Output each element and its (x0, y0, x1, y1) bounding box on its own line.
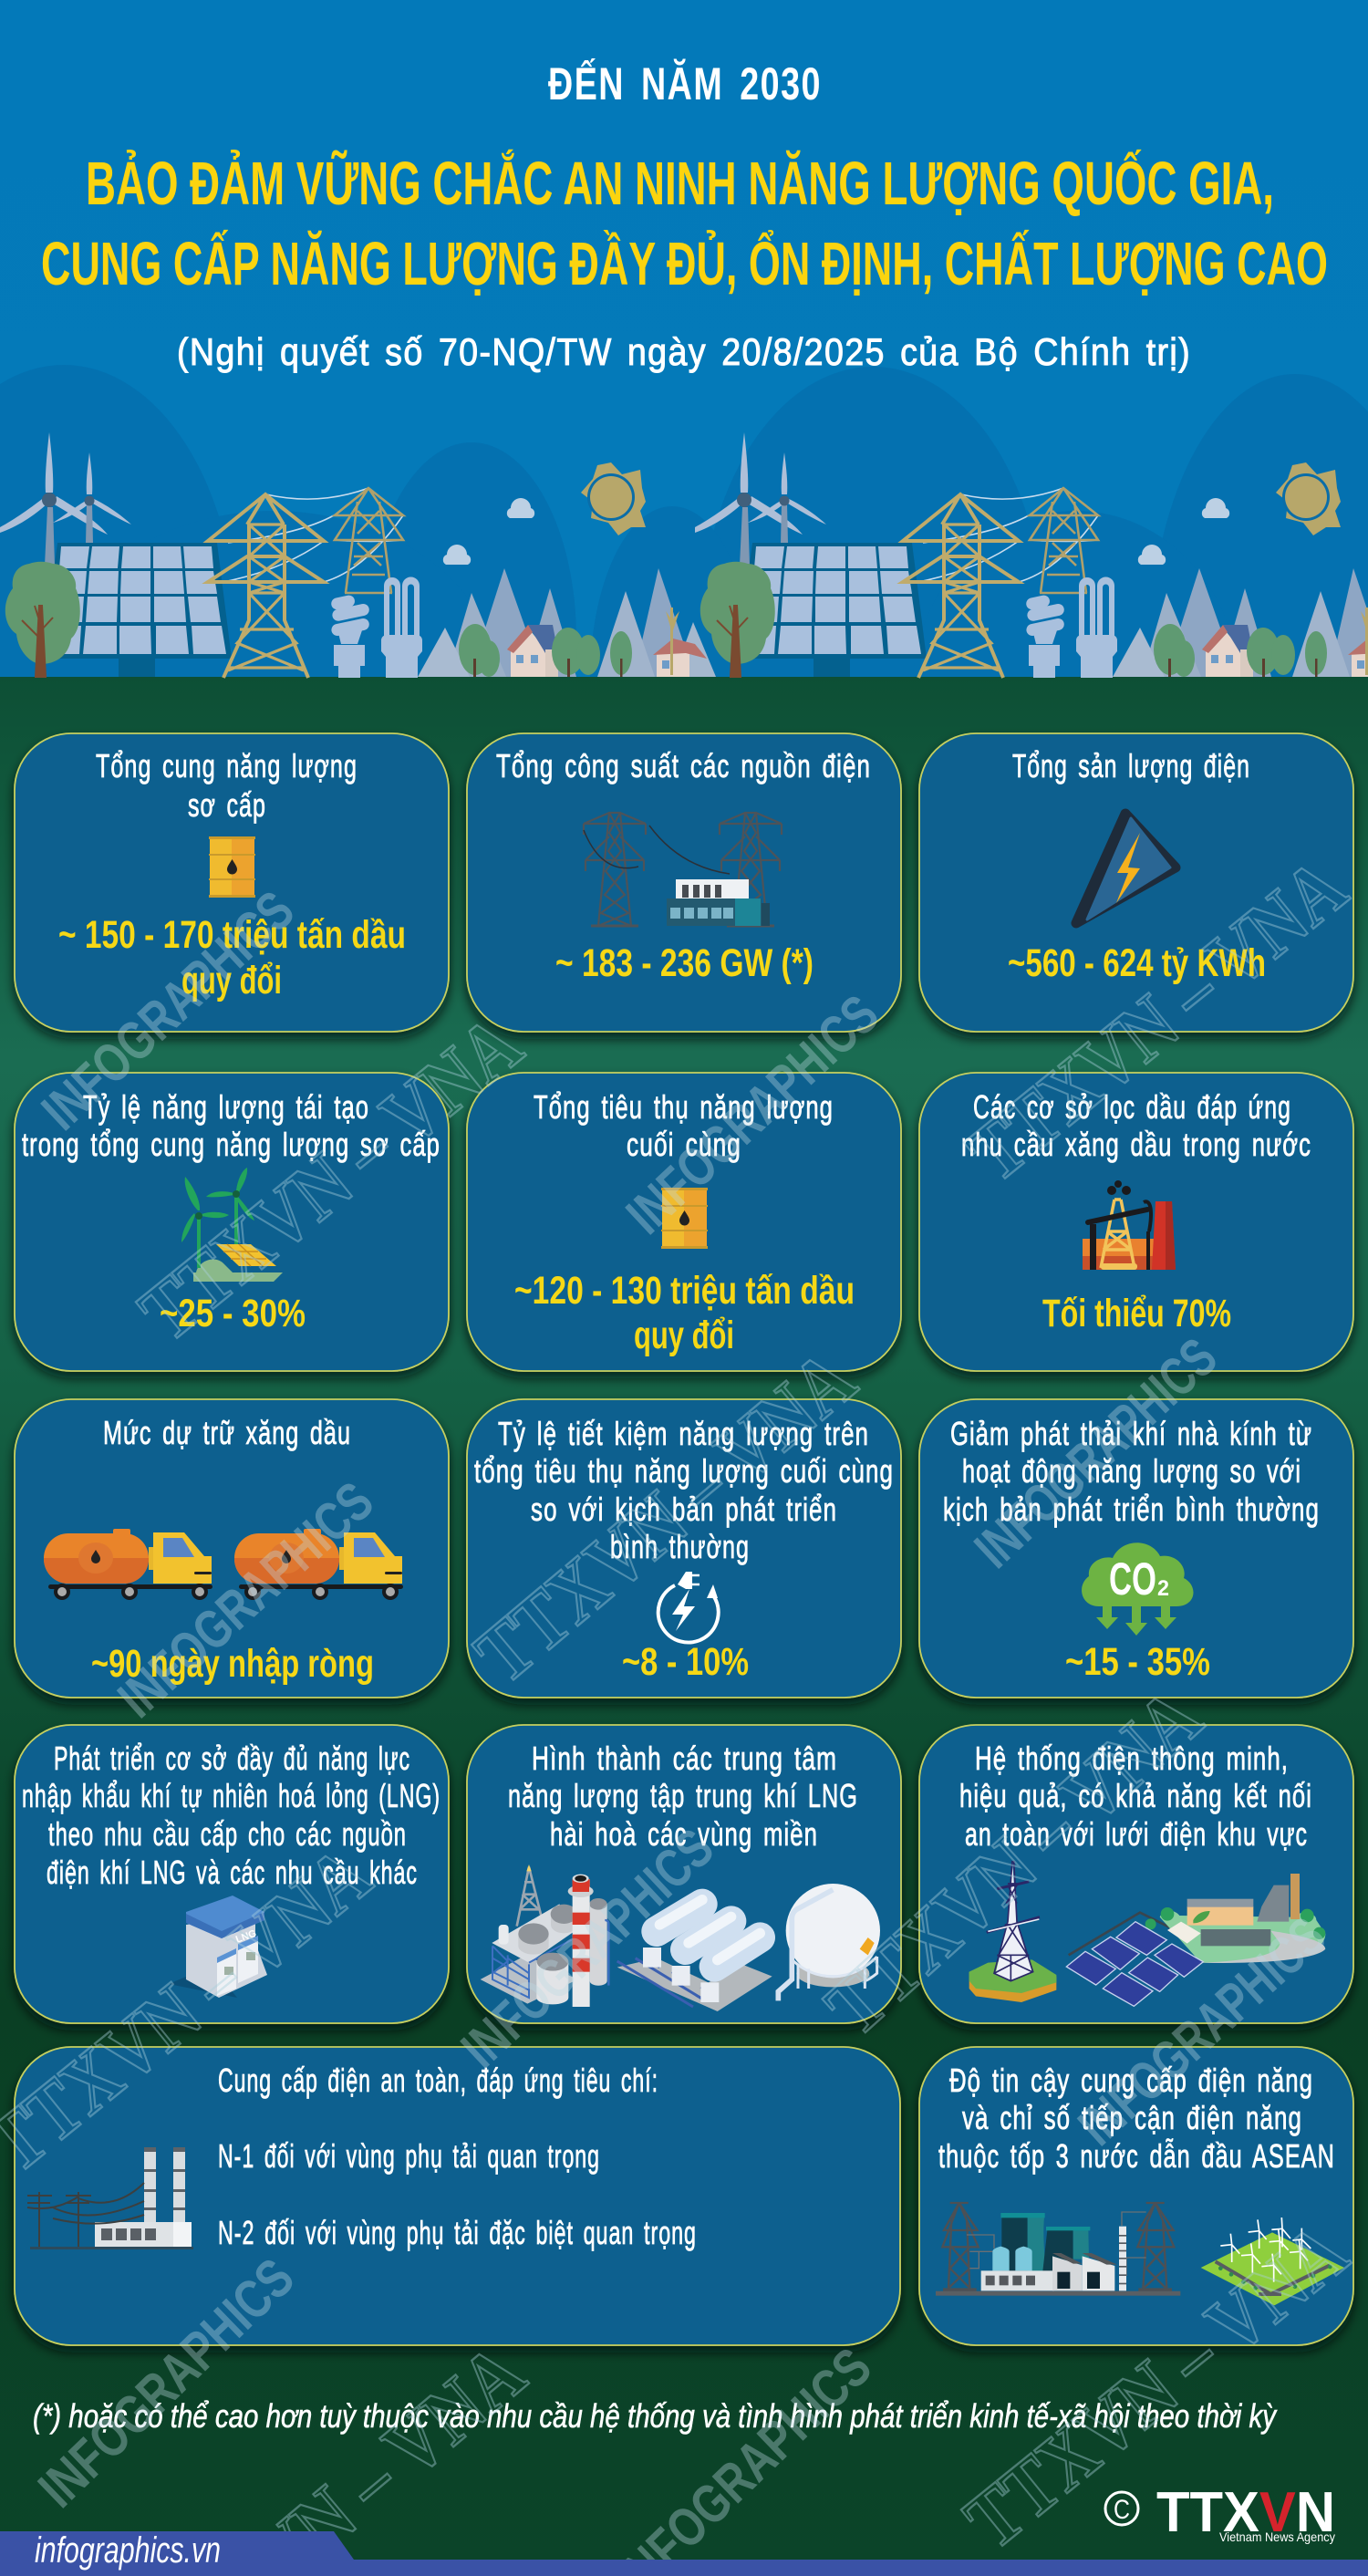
panel: final energy consumption: cuối cùng (627, 1126, 741, 1163)
panel: LNG energy hubs: Hình thành các trung tâm (532, 1740, 837, 1777)
panel: energy savings: ~8 - 10% (622, 1640, 749, 1684)
icon: tanker truck (44, 1529, 212, 1600)
watermarks: TTXVN – VNA (459, 1334, 872, 1700)
panel: total primary energy supply: quy đổi (181, 959, 282, 1002)
panel: energy savings: so với kịch bản phát triển (531, 1491, 837, 1528)
watermarks: INFOGRAPHICS (26, 2247, 306, 2519)
panel: safe power supply criteria: N-2 đối với vùng phụ tải đặc biệt quan trọng (218, 2214, 697, 2251)
logo: TTXVN: C (1114, 2495, 1130, 2525)
icon: tanker truck (234, 1529, 403, 1600)
icon: wind turbines and solar panel (181, 1168, 283, 1282)
icon: CO2 cloud: 2 (1157, 1576, 1169, 1601)
heading: main title (41, 149, 1328, 298)
background: green area (0, 677, 1368, 2576)
panel: greenhouse gas reduction: ~15 - 35% (1065, 1640, 1210, 1684)
panel: renewable share: Tỷ lệ năng lượng tái tạo (83, 1088, 369, 1126)
illustration: energy landscape banner (0, 432, 1368, 678)
watermarks: TTXVN – VNA (123, 999, 538, 1359)
icon: LNG station (169, 1896, 267, 1998)
panel: safe power supply criteria (15, 2047, 900, 2345)
panel: final energy consumption: Tổng tiêu thụ năng lượng (534, 1088, 834, 1126)
icon: warning triangle with lightning bolt (1076, 814, 1176, 923)
panel: energy savings: tổng tiêu thụ năng lượng cuối cùng (474, 1452, 894, 1490)
panel: refineries: Tối thiểu 70% (1042, 1292, 1231, 1335)
footer: site name: infographics.vn (35, 2530, 221, 2571)
panel: LNG import infrastructure: điện khí LNG và các nhu cầu khác (47, 1854, 418, 1891)
icon: plug and lightning (658, 1572, 719, 1643)
watermarks: INFOGRAPHICS (450, 1817, 725, 2080)
watermarks: INFOGRAPHICS (30, 879, 306, 1142)
background: hills (0, 365, 1368, 940)
panel: total primary energy supply: Tổng cung năng lượng (96, 747, 358, 784)
watermarks: INFOGRAPHICS (615, 983, 890, 1246)
footer: blue band and tab (0, 2531, 1368, 2576)
panel: petroleum reserves: Mức dự trữ xăng dầu (103, 1414, 351, 1451)
panel: ASEAN reliability ranking (919, 2047, 1353, 2345)
watermarks: INFOGRAPHICS (963, 1326, 1228, 1580)
panel: renewable share (15, 1073, 449, 1371)
panel: refineries (919, 1073, 1353, 1371)
panel: renewable share: ~25 - 30% (160, 1292, 306, 1335)
panel: total primary energy supply: ~ 150 - 170 triệu tấn dầu (58, 913, 406, 957)
panel: greenhouse gas reduction (919, 1399, 1353, 1698)
panel: LNG energy hubs: hài hoà các vùng miền (550, 1815, 818, 1853)
panel: LNG import infrastructure: theo nhu cầu cấp cho các nguồn (48, 1815, 407, 1853)
panel: total power source capacity: Tổng công suất các nguồn điện (496, 747, 871, 784)
panel: energy savings (467, 1399, 901, 1698)
heading: resolution reference: (Nghị quyết số 70-NQ/TW ngày 20/8/2025 của Bộ Chính trị) (177, 330, 1191, 373)
panel: final energy consumption: quy đổi (634, 1314, 734, 1357)
panel: LNG energy hubs: năng lượng tập trung khí LNG (508, 1777, 858, 1814)
panel: energy savings: Tỷ lệ tiết kiệm năng lượng trên (498, 1415, 869, 1452)
icon: CO2 cloud: CO (1109, 1553, 1156, 1605)
panel: petroleum reserves (15, 1399, 449, 1698)
logo: TTXVN: TTXVN (1156, 2481, 1335, 2544)
panel: total primary energy supply: sơ cấp (188, 786, 266, 824)
icon: oil derrick and refinery (1083, 1180, 1176, 1270)
panel: safe power supply criteria: Cung cấp điện an toàn, đáp ứng tiêu chí: (218, 2062, 658, 2099)
icon: CO2 cloud (1082, 1542, 1193, 1636)
panel: renewable share: trong tổng cung năng lượng sơ cấp (22, 1126, 440, 1163)
icon: thermal plant with pylons (936, 2203, 1180, 2296)
panel: total power source capacity: ~ 183 - 236 GW (*) (555, 941, 814, 985)
panel: total primary energy supply (15, 733, 449, 1032)
panel: total electricity output (919, 733, 1353, 1032)
panel: total electricity output: ~560 - 624 tỷ KWh (1008, 941, 1266, 985)
icon: oil barrel (661, 1188, 708, 1249)
icon: wind farm tile (1201, 2218, 1344, 2305)
icon: pylons and substation (584, 813, 782, 926)
icon: oil barrel (209, 836, 255, 898)
panel: petroleum reserves: ~90 ngày nhập ròng (91, 1642, 374, 1686)
panel: safe power supply criteria: N-1 đối với vùng phụ tải quan trọng (218, 2137, 600, 2175)
watermarks: TTXVN – VNA (809, 1672, 1218, 2053)
icon: pylon, solar field and plant (969, 1861, 1325, 2006)
panel: final energy consumption (467, 1073, 901, 1371)
panel: smart grid (919, 1725, 1353, 2023)
icon: LNG station: LNG (234, 1928, 258, 1946)
panel: final energy consumption: ~120 - 130 triệu tấn dầu (514, 1269, 855, 1313)
panel: LNG import infrastructure: Phát triển cơ sở đầy đủ năng lực (54, 1740, 410, 1777)
heading: year: ĐẾN NĂM 2030 (548, 58, 822, 109)
icon: power plant with stacks and poles (27, 2147, 193, 2249)
panel: energy savings: bình thường (610, 1528, 750, 1565)
background: sky (0, 0, 1368, 680)
icon: LNG plant, tanks and sphere (481, 1864, 880, 2011)
panel: LNG import infrastructure: nhập khẩu khí tự nhiên hoá lỏng (LNG) (22, 1777, 440, 1814)
panel: total electricity output: Tổng sản lượng điện (1012, 747, 1250, 784)
watermarks: INFOGRAPHICS (107, 1470, 385, 1729)
panel: LNG import infrastructure (15, 1725, 449, 2023)
logo: TTXVN: Vietnam News Agency (1219, 2529, 1335, 2544)
panel: LNG energy hubs (467, 1725, 901, 2023)
panel: total power source capacity (467, 733, 901, 1032)
watermarks (0, 842, 1363, 2576)
